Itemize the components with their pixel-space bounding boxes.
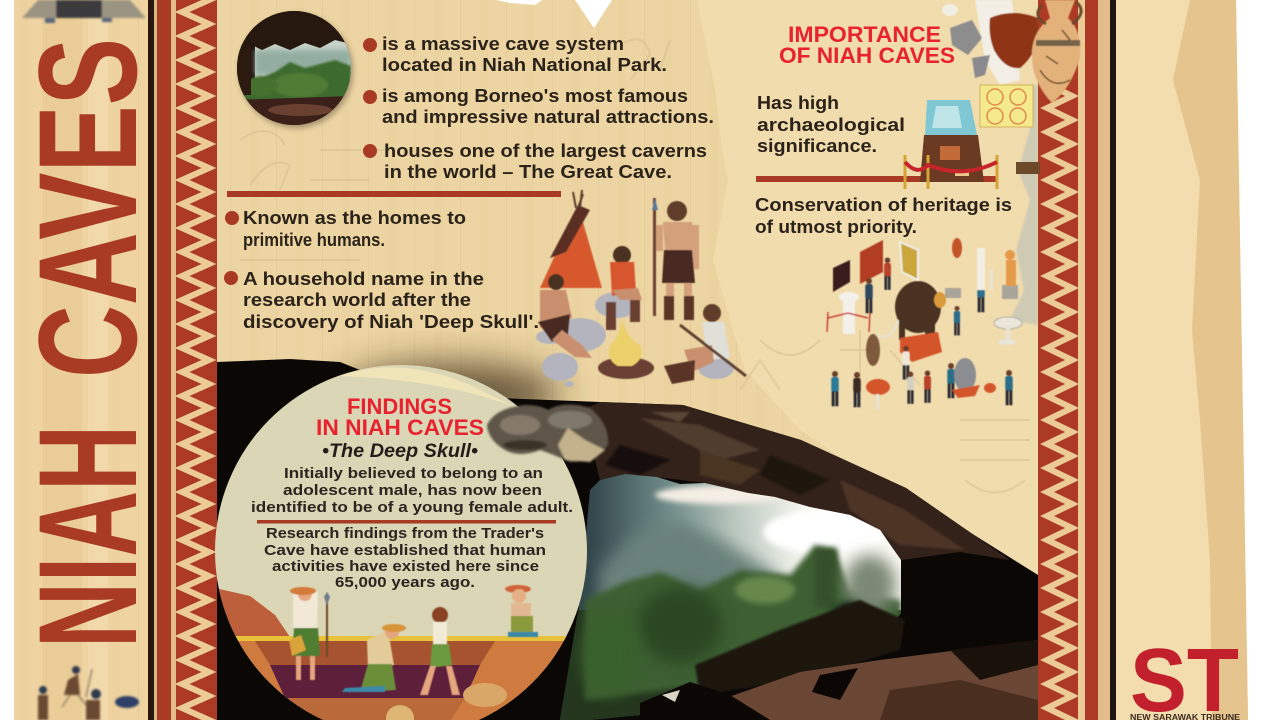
text block: deep skull: Initially believed to belong to an xyxy=(284,466,543,482)
panel: main paper texture xyxy=(217,0,1038,720)
bullet xyxy=(225,211,239,225)
illustration: excavation scene xyxy=(215,585,587,720)
text block: conservation xyxy=(755,195,1012,237)
mammoth xyxy=(878,281,942,362)
text block: conservation: of utmost priority. xyxy=(755,217,917,237)
illustration: cave people around a fire xyxy=(536,190,746,387)
bullet xyxy=(363,90,377,104)
white torn gap at the top of the paper xyxy=(496,0,612,28)
subheading: •The Deep Skull• xyxy=(322,441,478,462)
text block: trader's cave: Cave have established that human xyxy=(264,543,546,559)
text block: trader's cave: activities have existed here since xyxy=(272,559,539,575)
illustration: museum visitors xyxy=(827,238,1022,410)
text block: deep skull: identified to be of a young female adult. xyxy=(251,500,573,516)
text block: trader's cave: 65,000 years ago. xyxy=(335,575,475,591)
text block: about the cave: in the world – The Great Cave. xyxy=(384,162,672,182)
text block: about the cave: houses one of the largest caverns xyxy=(384,141,707,161)
remaining exhibits xyxy=(866,238,1016,410)
left border band xyxy=(148,0,217,720)
stones xyxy=(536,292,734,387)
text block: primitive humans: research world after the xyxy=(243,290,471,310)
fire xyxy=(598,320,654,379)
heading: importance xyxy=(779,22,955,68)
heading: importance: IMPORTANCE xyxy=(788,22,941,47)
title: NIAH xyxy=(9,425,166,648)
archaeologist with spear xyxy=(289,587,330,680)
bullet xyxy=(224,271,238,285)
text block: about the cave: is among Borneo's most famous xyxy=(382,86,688,106)
icon: bottom-left prehistoric people xyxy=(38,666,139,720)
standing man with spear xyxy=(652,198,699,320)
rock ledge xyxy=(695,600,905,695)
bullet xyxy=(363,38,377,52)
text block: primitive humans: Known as the homes to xyxy=(243,208,466,228)
heading: FINDINGS xyxy=(347,394,452,419)
wall paintings xyxy=(833,240,918,292)
archaeologist on the ledge xyxy=(505,585,538,637)
text block: archaeological significance: significance. xyxy=(757,136,877,156)
seated woman in orange xyxy=(606,246,642,330)
seated woman with stick xyxy=(664,304,746,384)
text block: archaeological significance: Has high xyxy=(757,93,839,113)
text block: about the cave: and impressive natural attractions. xyxy=(382,107,714,127)
display tables xyxy=(945,270,1022,345)
text block: deep skull xyxy=(251,466,573,516)
text block: trader's cave: Research findings from the Trader's xyxy=(266,526,544,542)
text block: primitive humans xyxy=(224,208,539,332)
kneeling archaeologist xyxy=(342,624,406,692)
text block: primitive humans: primitive humans. xyxy=(243,230,385,250)
heading xyxy=(316,394,484,440)
cave floor xyxy=(640,640,1038,720)
cave opening xyxy=(560,460,910,720)
side table xyxy=(1016,162,1040,174)
poster xyxy=(980,85,1033,127)
text block: archaeological significance: archaeological xyxy=(757,115,905,135)
text block: primitive humans: discovery of Niah 'Deep Skull'. xyxy=(243,312,539,332)
archaeologist woman xyxy=(420,607,460,695)
text block: about the cave xyxy=(363,34,714,182)
tent xyxy=(540,190,602,288)
icon: pottery artifacts xyxy=(942,0,1081,103)
text block: about the cave: is a massive cave system xyxy=(382,34,624,54)
visitor figures xyxy=(831,258,1013,407)
bullet xyxy=(363,144,377,158)
cave photograph xyxy=(217,359,1038,720)
cave shadow xyxy=(340,363,560,427)
title xyxy=(9,38,166,648)
text block: archaeological significance xyxy=(757,93,905,156)
panel: right paper strip xyxy=(1116,0,1248,720)
text block: primitive humans: A household name in the xyxy=(243,269,484,289)
cave roof rock xyxy=(560,402,1010,560)
panel: left title strip xyxy=(14,0,148,720)
text block: conservation: Conservation of heritage is xyxy=(755,195,1012,215)
heading: importance: OF NIAH CAVES xyxy=(779,43,955,68)
divider rule xyxy=(756,176,998,182)
text block: deep skull: adolescent male, has now been xyxy=(283,483,542,499)
white statue xyxy=(827,292,870,334)
text block: trader's cave xyxy=(264,526,546,591)
panel: right border band xyxy=(1010,0,1116,720)
icon: cave thumbnail xyxy=(237,11,353,128)
icon: museum display case xyxy=(905,85,1040,189)
seated man xyxy=(538,274,592,358)
black cave mass xyxy=(217,359,1038,720)
icon: top-left cave dwellers xyxy=(22,0,146,23)
text block: about the cave: located in Niah National Park. xyxy=(382,55,667,75)
heading: IN NIAH CAVES xyxy=(316,415,484,440)
panel: findings circle xyxy=(215,365,587,720)
icon: deep skull xyxy=(487,404,608,462)
